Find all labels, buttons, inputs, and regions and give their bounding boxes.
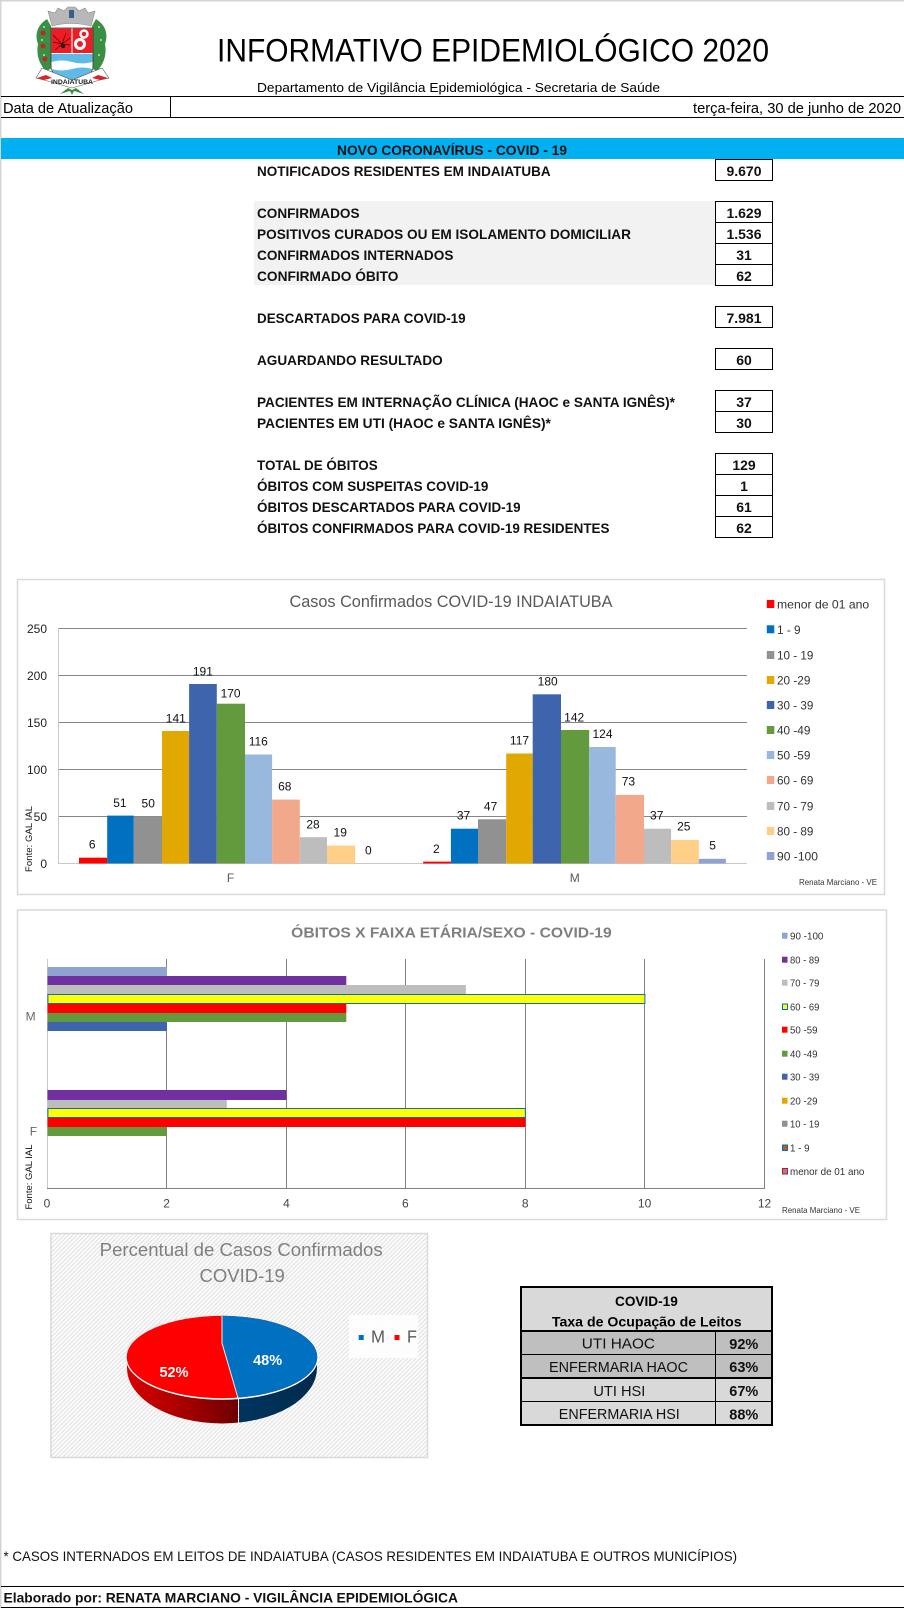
data labels: 68 [278, 780, 292, 794]
legend: 30 - 39 [777, 698, 814, 712]
data labels: 180 [538, 674, 558, 688]
data labels: 141 [166, 712, 186, 726]
category labels [227, 871, 580, 885]
panel: indicators table: DESCARTADOS PARA COVID-19 [257, 310, 466, 326]
panel: indicators table: 31 [736, 247, 752, 263]
data labels: 0 [365, 844, 372, 858]
author credit: Renata Marciano - VE [799, 877, 877, 887]
update date row: Data de Atualização [3, 101, 133, 117]
legend: 60 - 69 [790, 1002, 820, 1014]
legend: menor de 01 ano [790, 1166, 865, 1178]
data labels: 6 [89, 838, 96, 852]
table rows: ENFERMARIA HSI [559, 1407, 680, 1423]
panel: indicators table [254, 159, 772, 538]
panel: indicators table: 37 [736, 394, 752, 410]
pie title [100, 1239, 383, 1286]
category labels: M [570, 871, 580, 885]
panel: indicators table: CONFIRMADO ÓBITO [257, 267, 399, 284]
legend: 90 -100 [777, 850, 818, 864]
data labels: 50 [142, 796, 155, 810]
legend: 20 -29 [790, 1096, 818, 1108]
pie title: COVID-19 [200, 1265, 285, 1286]
pie 3D sides [126, 1315, 318, 1426]
table values: 67% [729, 1384, 758, 1400]
legend: 80 - 89 [790, 954, 820, 966]
category labels: F [227, 871, 234, 885]
data labels: 47 [484, 800, 498, 814]
legend: 50 -59 [777, 748, 811, 762]
axis labels: 12 [758, 1196, 771, 1210]
table rows: UTI HSI [593, 1384, 645, 1400]
legend: 20 -29 [777, 674, 811, 688]
axis labels: 10 [638, 1196, 652, 1210]
panel: indicators table: ÓBITOS DESCARTADOS PARA COVID-19 [257, 498, 521, 515]
axis labels: F [30, 1124, 37, 1138]
data labels: 25 [677, 820, 691, 834]
table values [729, 1337, 758, 1424]
legend: 30 - 39 [790, 1072, 820, 1084]
panel: indicators table: 61 [736, 499, 752, 515]
legend [782, 930, 865, 1178]
panel: indicators table: 60 [736, 352, 752, 368]
panel: confirmed cases bar chart [18, 580, 884, 894]
panel: indicators table: POSITIVOS CURADOS OU EM ISOLAMENTO DOMICILIAR [257, 226, 631, 242]
pie slice: F 52% [127, 1316, 317, 1398]
y axis grid and labels: 50 [34, 810, 47, 824]
legend: 80 - 89 [777, 824, 814, 838]
pie legend: M [371, 1326, 385, 1346]
legend: 1 - 9 [777, 623, 801, 637]
table values: 92% [729, 1337, 758, 1353]
source note: Fonte: GAL IAL [24, 806, 35, 872]
legend: 10 - 19 [790, 1118, 820, 1130]
axis labels: 0 [44, 1196, 51, 1210]
chart title: casos confirmados: Casos Confirmados COVID-19 INDAIATUBA [290, 593, 612, 611]
pie slice: M 48%: 48% [253, 1353, 282, 1369]
y axis grid and labels [27, 622, 747, 871]
icon: Indaiatuba coat of arms: INDAIATUBA [51, 79, 93, 86]
axis labels: 2 [163, 1196, 170, 1210]
data labels: 142 [564, 710, 585, 724]
banner: novo coronavirus [1, 138, 904, 159]
table values: 63% [729, 1360, 758, 1376]
table heading: COVID-19 [615, 1293, 678, 1309]
y axis grid and labels: 200 [27, 669, 47, 683]
bars: female deaths [48, 1090, 526, 1136]
legend: 40 -49 [777, 724, 811, 738]
panel: indicators table: TOTAL DE ÓBITOS [257, 456, 378, 473]
panel: indicators table: 9.670 [726, 163, 762, 179]
panel: indicators table: 62 [736, 268, 752, 284]
data labels: 37 [650, 808, 664, 822]
data labels [89, 664, 716, 858]
data labels: 124 [592, 727, 613, 741]
panel: indicators table: PACIENTES EM INTERNAÇÃO CLÍNICA (HAOC e SANTA IGNÊS)* [257, 393, 675, 410]
banner: novo coronavirus: NOVO CORONAVÍRUS - COVID - 19 [337, 142, 567, 158]
subtitle: Departamento de Vigilância Epidemiológica - Secretaria de Saúde [257, 80, 660, 95]
legend [767, 598, 870, 864]
data labels: 5 [709, 838, 716, 852]
panel: indicators table: 1.629 [726, 205, 762, 221]
panel: indicators table: CONFIRMADOS INTERNADOS [257, 247, 453, 263]
y axis grid and labels: 150 [27, 716, 47, 730]
legend: 60 - 69 [777, 774, 814, 788]
title: INFORMATIVO EPIDEMIOLÓGICO 2020 [217, 32, 769, 68]
table rows [549, 1336, 688, 1423]
legend: 1 - 9 [790, 1142, 810, 1154]
table heading: Taxa de Ocupação de Leitos [552, 1314, 742, 1330]
axis labels: M [26, 1010, 36, 1024]
y axis grid and labels: 250 [27, 622, 47, 636]
data labels: 73 [622, 774, 635, 788]
data labels: 191 [193, 664, 213, 678]
panel: indicators table: 30 [736, 415, 752, 431]
data labels: 2 [433, 842, 440, 856]
panel: indicators table: 129 [732, 457, 756, 473]
panel: deaths by age and sex bar chart [18, 910, 886, 1220]
panel: indicators table: PACIENTES EM UTI (HAOC e SANTA IGNÊS)* [257, 414, 551, 431]
legend: 90 -100 [790, 930, 824, 942]
pie title: Percentual de Casos Confirmados [100, 1239, 383, 1260]
icon: Indaiatuba coat of arms [36, 7, 109, 95]
panel: indicators table: NOTIFICADOS RESIDENTES EM INDAIATUBA [257, 163, 551, 179]
pie slice: M 48% [222, 1316, 318, 1398]
legend: 70 - 79 [790, 978, 820, 990]
footnote: * CASOS INTERNADOS EM LEITOS DE INDAIATUBA (CASOS RESIDENTES EM INDAIATUBA E OUTROS MUNICÍPIOS) [4, 1548, 737, 1564]
pie legend [349, 1315, 418, 1358]
legend: 40 -49 [790, 1048, 818, 1060]
data labels: 116 [249, 734, 268, 748]
panel: indicators table: 7.981 [726, 310, 762, 326]
panel: indicators table: CONFIRMADOS [257, 205, 360, 221]
footer: author: Elaborado por: RENATA MARCIANO - VIGILÂNCIA EPIDEMIOLÓGICA [4, 1588, 458, 1606]
pie legend: F [407, 1326, 417, 1346]
panel: indicators table: 62 [736, 520, 752, 536]
axis labels: 4 [283, 1196, 290, 1210]
axis labels: 8 [522, 1196, 529, 1210]
data labels: 19 [334, 826, 347, 840]
table rows: ENFERMARIA HAOC [549, 1360, 688, 1376]
source note: Fonte: GAL IAL [24, 1144, 35, 1210]
author credit: Renata Marciano - VE [782, 1205, 860, 1215]
legend: 10 - 19 [777, 648, 814, 662]
bars: female [79, 684, 355, 864]
y axis grid and labels: 0 [40, 857, 47, 871]
chart title: obitos: ÓBITOS X FAIXA ETÁRIA/SEXO - COVID-19 [291, 924, 612, 942]
bars: male deaths [48, 967, 645, 1031]
legend: 70 - 79 [777, 800, 814, 814]
grid [47, 959, 765, 1188]
panel: indicators table: ÓBITOS COM SUSPEITAS COVID-19 [257, 477, 489, 494]
table heading [552, 1293, 742, 1330]
pie slice: F 52%: 52% [159, 1365, 189, 1381]
legend: menor de 01 ano [777, 598, 870, 612]
data labels: 117 [510, 734, 529, 748]
panel: indicators table: ÓBITOS CONFIRMADOS PARA COVID-19 RESIDENTES [257, 519, 610, 536]
bars: male [423, 694, 726, 864]
table rows: UTI HAOC [582, 1336, 655, 1352]
data labels: 51 [113, 796, 127, 810]
panel: indicators table: AGUARDANDO RESULTADO [257, 352, 443, 368]
panel: indicators table: 1 [740, 478, 748, 494]
legend: 50 -59 [790, 1024, 818, 1036]
panel: indicators table: 1.536 [726, 226, 762, 242]
data labels: 37 [457, 808, 470, 822]
update date row: terça-feira, 30 de junho de 2020 [693, 101, 901, 117]
panel: pie chart percent of confirmed cases [51, 1234, 428, 1458]
axis labels [26, 1010, 771, 1210]
data labels: 170 [221, 686, 241, 700]
update date row [1, 96, 904, 118]
panel: bed occupancy table [521, 1287, 772, 1425]
data labels: 28 [306, 818, 320, 832]
table values: 88% [729, 1408, 758, 1424]
y axis grid and labels: 100 [27, 763, 47, 777]
axis labels: 6 [402, 1196, 409, 1210]
